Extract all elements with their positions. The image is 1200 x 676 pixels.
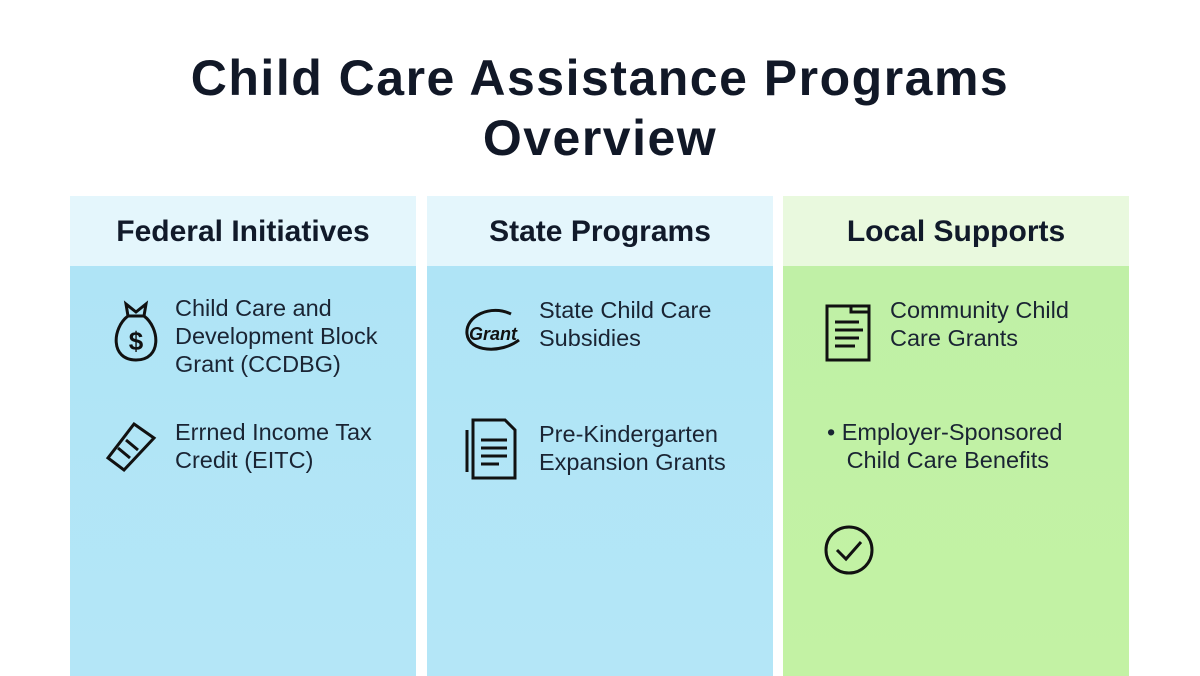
title: Overview bbox=[483, 110, 717, 166]
icon: money bag bbox=[114, 300, 158, 362]
title bbox=[191, 50, 1009, 166]
icon: diploma bbox=[106, 422, 156, 472]
icon: document bbox=[466, 418, 516, 480]
panel: local bbox=[783, 196, 1129, 676]
panel: federal bbox=[70, 196, 416, 676]
heading: federal bbox=[70, 196, 416, 266]
text: CCDBG: Grant (CCDBG) bbox=[175, 351, 341, 377]
icon: check bbox=[824, 526, 874, 574]
heading: state bbox=[427, 196, 773, 266]
icon: grant: Grant bbox=[469, 324, 518, 344]
heading: local bbox=[783, 196, 1129, 266]
text: CCDBG: Child Care and bbox=[175, 295, 332, 321]
heading: state: State Programs bbox=[489, 215, 711, 248]
text: EITC: Errned Income Tax bbox=[175, 419, 372, 445]
panel: state bbox=[427, 196, 773, 676]
icon: grant bbox=[465, 308, 520, 351]
text: subsidies bbox=[539, 297, 711, 351]
text: CCDBG: Development Block bbox=[175, 323, 377, 349]
heading: local: Local Supports bbox=[847, 215, 1065, 248]
text: EITC bbox=[175, 419, 372, 473]
icon: document bbox=[826, 304, 870, 362]
text: community bbox=[890, 297, 1069, 351]
text: subsidies: Subsidies bbox=[539, 325, 641, 351]
icon: money bag: $ bbox=[129, 326, 144, 356]
text: employer: Child Care Benefits bbox=[847, 447, 1049, 473]
text: community: Care Grants bbox=[890, 325, 1018, 351]
text: EITC: Credit (EITC) bbox=[175, 447, 313, 473]
text: subsidies: State Child Care bbox=[539, 297, 711, 323]
text: CCDBG bbox=[175, 295, 378, 377]
heading: federal: Federal Initiatives bbox=[116, 215, 370, 248]
text: pre-k: Expansion Grants bbox=[539, 449, 726, 475]
text: employer bbox=[827, 419, 1063, 473]
text: pre-k bbox=[539, 421, 726, 475]
text: community: Community Child bbox=[890, 297, 1069, 323]
text: employer: • Employer-Sponsored bbox=[827, 419, 1063, 445]
title: Child Care Assistance Programs bbox=[191, 50, 1009, 106]
text: pre-k: Pre-Kindergarten bbox=[539, 421, 718, 447]
